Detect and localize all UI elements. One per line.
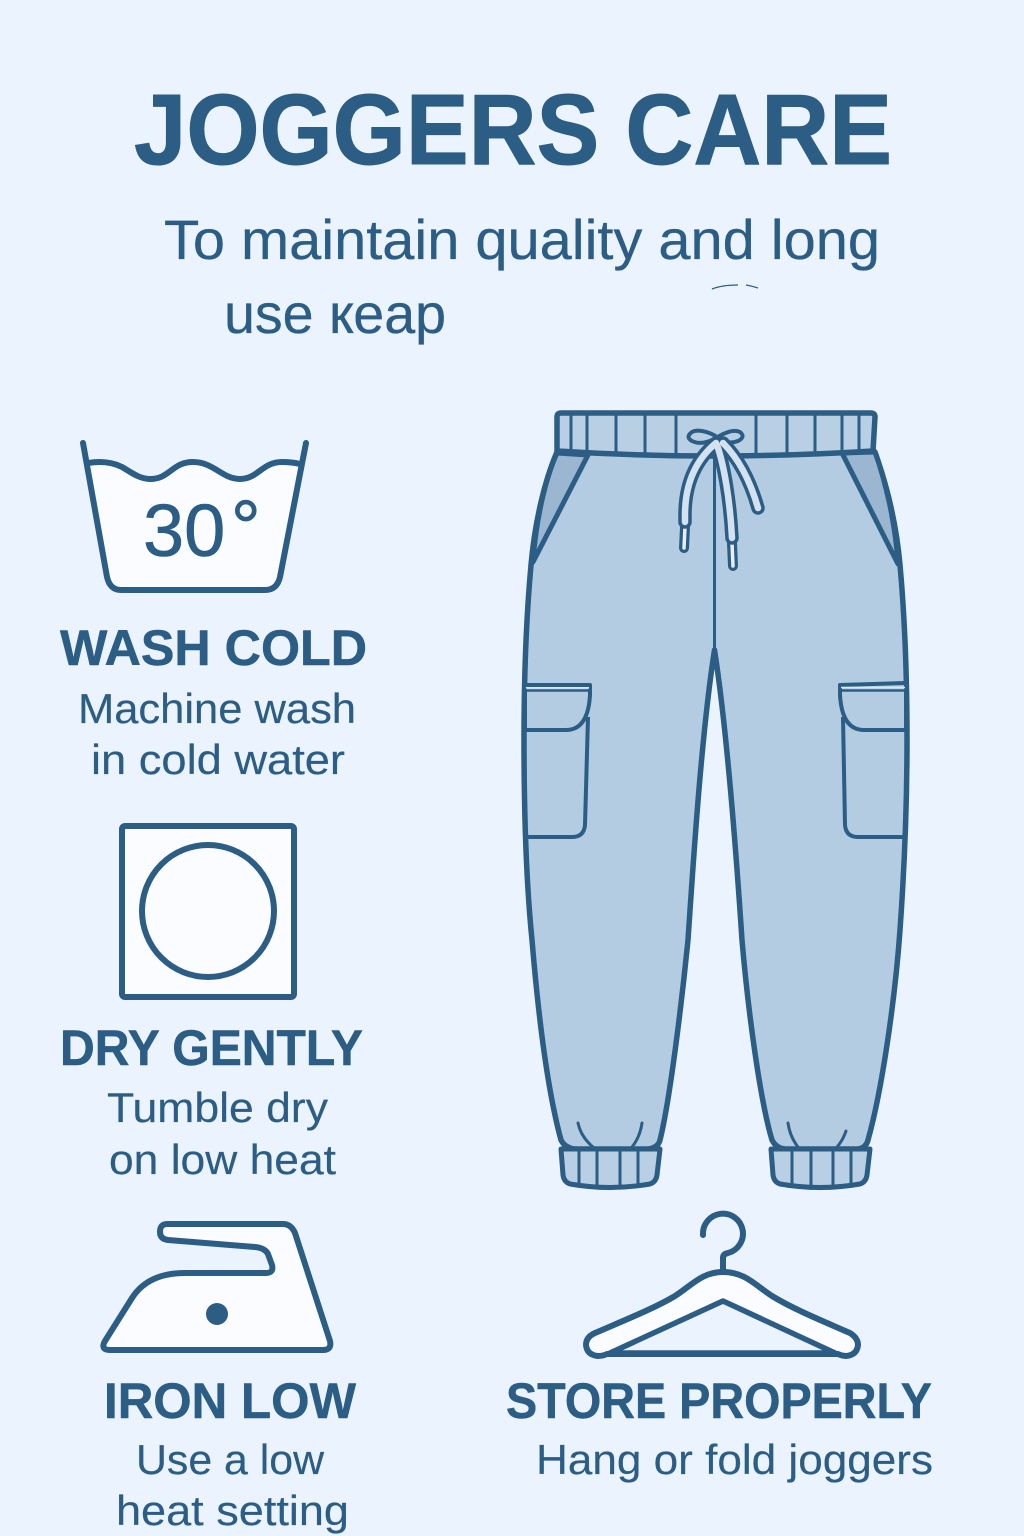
text: dry gently description: on low heat bbox=[109, 1136, 336, 1183]
text: iron low description: Use a low bbox=[136, 1436, 325, 1483]
heading: iron low: IRON LOW bbox=[104, 1373, 357, 1429]
center seam bbox=[713, 455, 716, 652]
text: wash cold description bbox=[78, 685, 356, 783]
text: wash cold description: in cold water bbox=[91, 736, 345, 783]
title: JOGGERS CARE bbox=[134, 74, 892, 186]
text: iron low description bbox=[116, 1436, 349, 1534]
joggers body bbox=[524, 452, 907, 1149]
icon: wash 30 degrees: ° bbox=[231, 485, 261, 568]
text: dry gently description bbox=[107, 1084, 336, 1183]
subtitle bbox=[164, 208, 880, 345]
drawstring ties bbox=[684, 443, 758, 566]
right cuff bbox=[771, 1123, 870, 1188]
icon: tumble dry bbox=[122, 826, 294, 997]
icon: wash 30 degrees: 30 bbox=[143, 489, 225, 572]
text: dry gently description: Tumble dry bbox=[107, 1084, 328, 1131]
icon: hanger bbox=[586, 1214, 858, 1356]
waistband bbox=[557, 413, 875, 456]
stray mark bbox=[712, 285, 758, 289]
text: wash cold description: Machine wash bbox=[78, 685, 356, 732]
heading: dry gently: DRY GENTLY bbox=[60, 1020, 363, 1076]
left cuff bbox=[561, 1123, 660, 1188]
heading: wash cold: WASH COLD bbox=[60, 620, 367, 676]
right side pocket bbox=[842, 452, 898, 564]
icon: wash 30 degrees bbox=[83, 443, 306, 590]
right cargo pocket bbox=[840, 683, 906, 837]
subtitle: To maintain quality and long bbox=[164, 208, 880, 271]
illustration: joggers bbox=[524, 413, 907, 1188]
drawstring bow bbox=[688, 431, 743, 443]
left side pocket bbox=[533, 453, 588, 562]
text: store properly description: Hang or fold joggers bbox=[536, 1436, 933, 1483]
left cargo pocket bbox=[525, 685, 590, 837]
icon: iron bbox=[103, 1224, 330, 1350]
heading: store properly: STORE PROPERLY bbox=[506, 1373, 932, 1429]
text: iron low description: heat setting bbox=[116, 1487, 349, 1534]
subtitle: use кeap bbox=[224, 282, 446, 345]
